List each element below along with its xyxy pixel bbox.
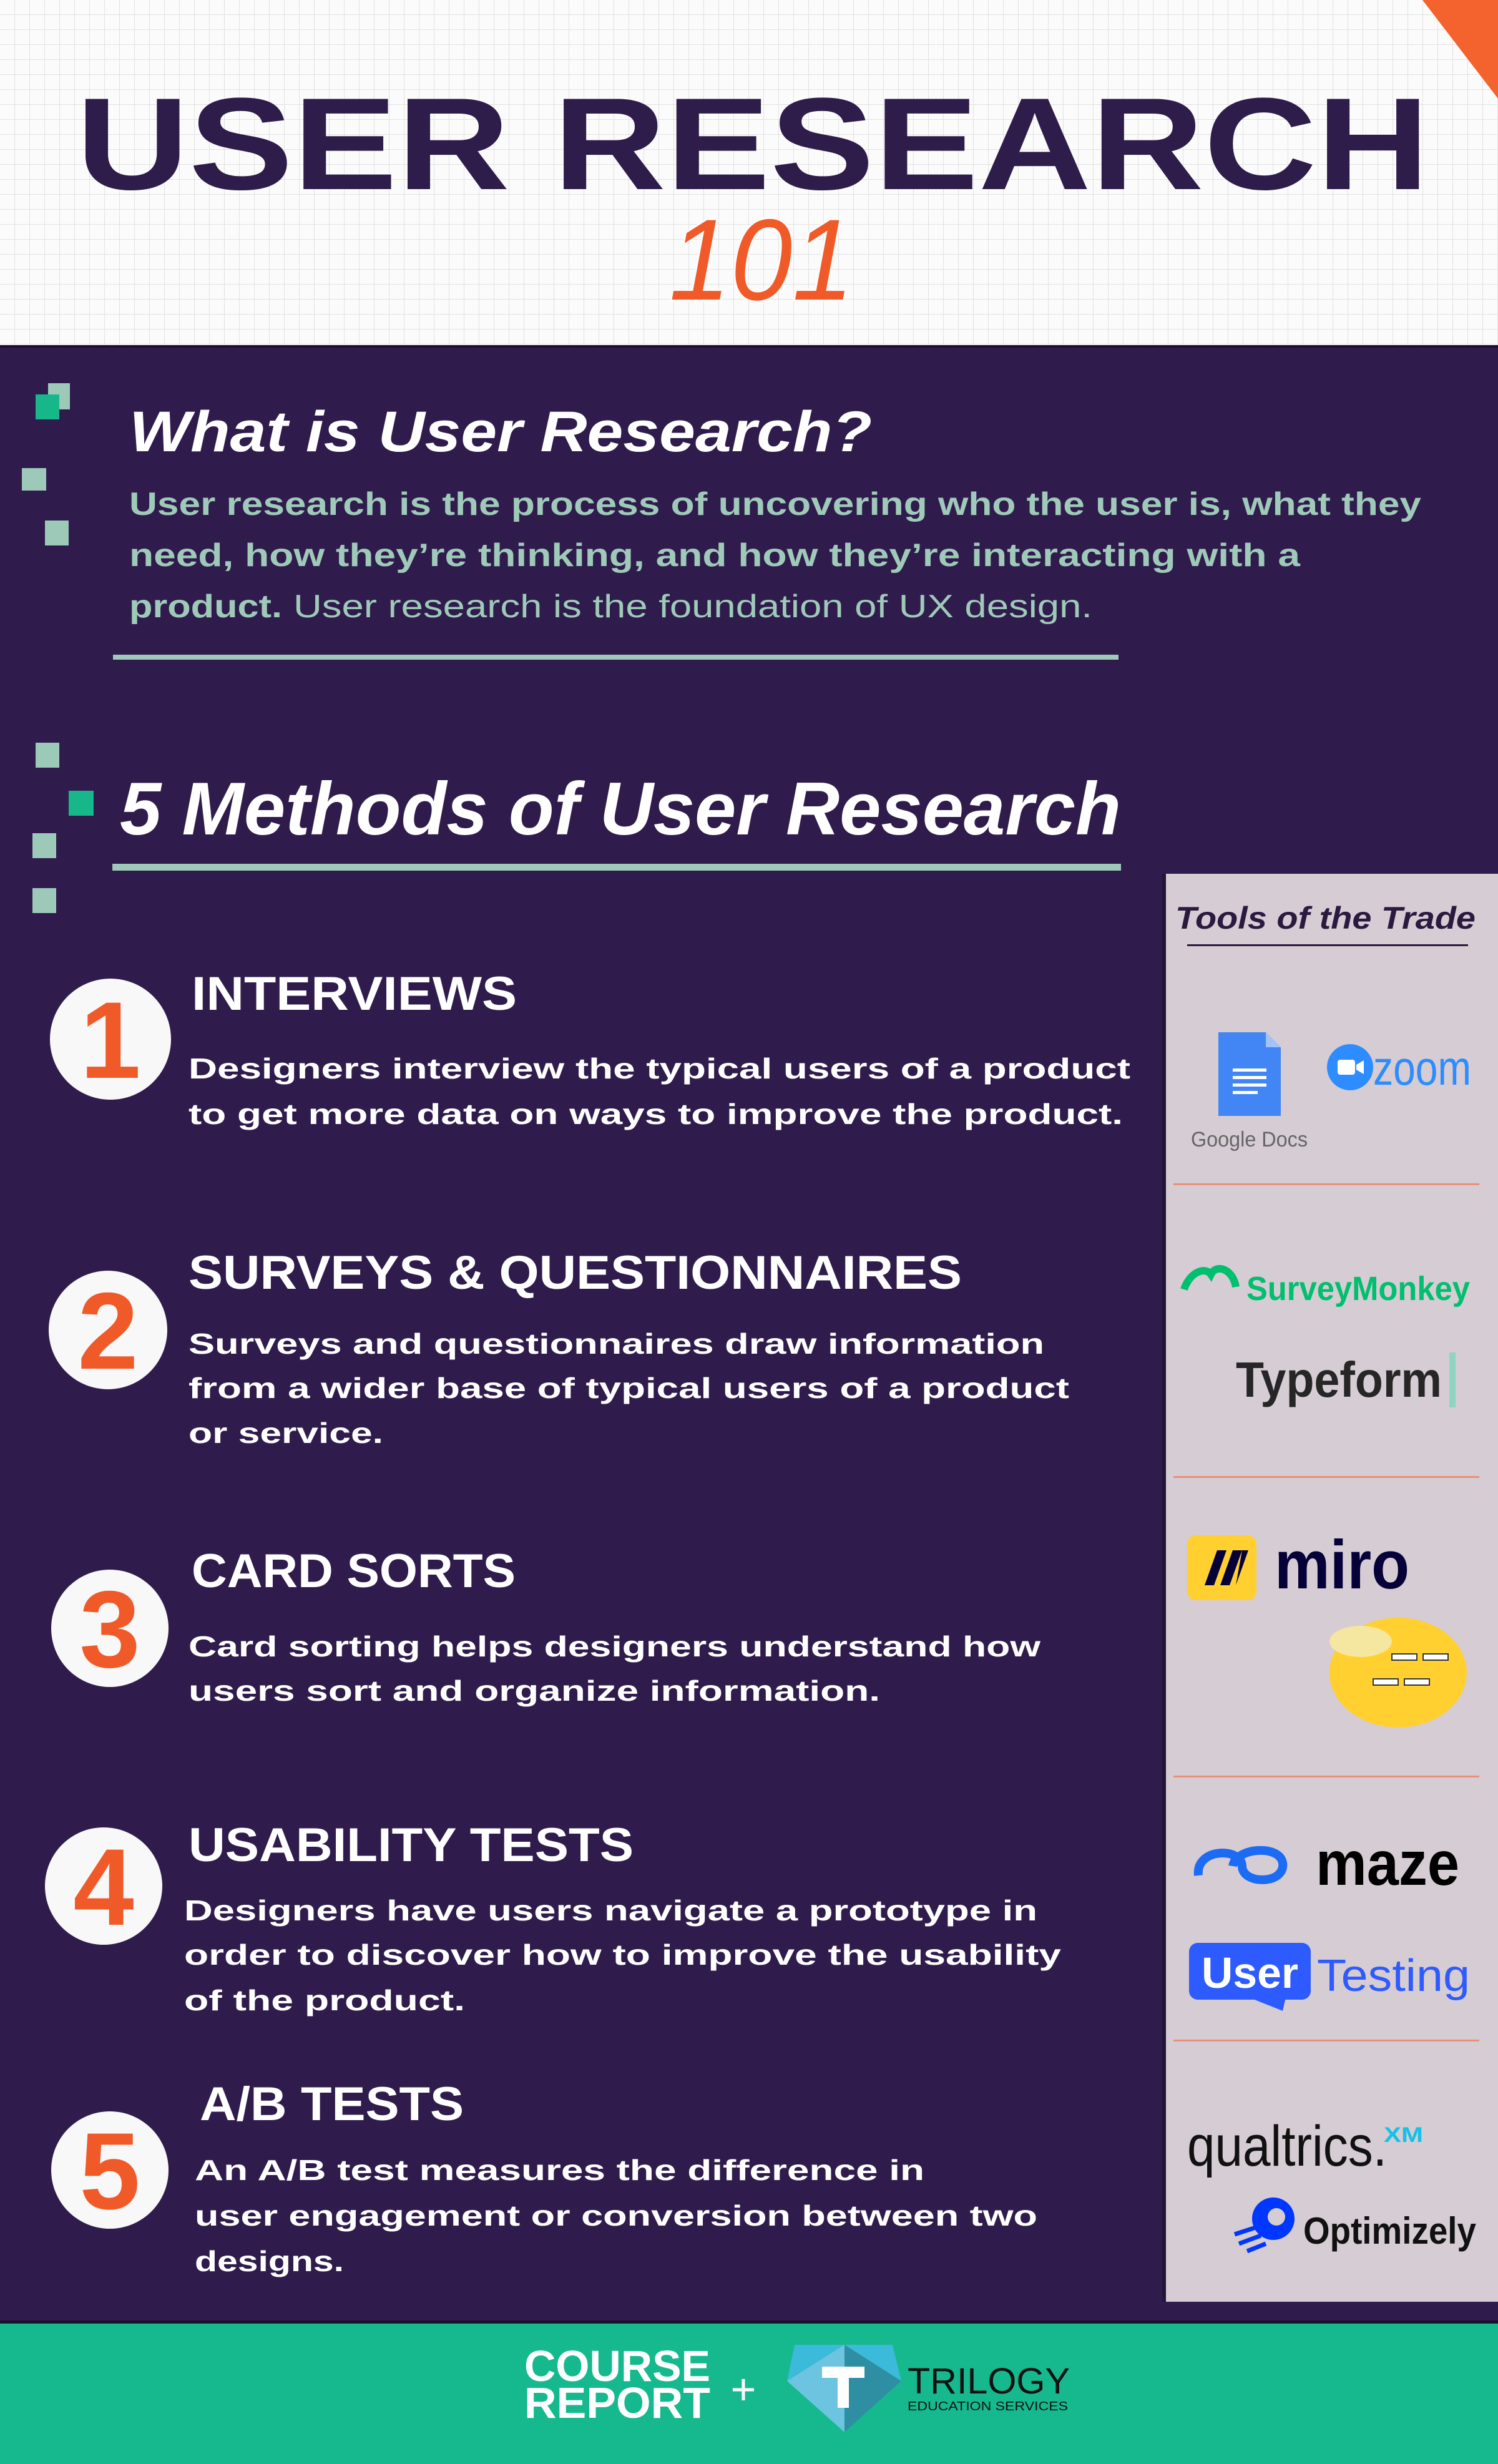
logo: google docs xyxy=(1191,1032,1308,1151)
icon: number 1: 1 xyxy=(80,980,141,1102)
logo: optimizely xyxy=(1235,2198,1477,2252)
icon: number 3 xyxy=(51,1569,169,1691)
logo: optimizely: Optimizely xyxy=(1303,2210,1477,2252)
logo: typeform: Typeform xyxy=(1236,1352,1442,1407)
illustration: yellow blob xyxy=(1329,1618,1467,1728)
method 4: usability tests xyxy=(45,1819,1062,2017)
method 4: usability tests: Designers have users navigate a prototype in xyxy=(184,1894,1037,1927)
method 2: surveys: from a wider base of typical users of a product xyxy=(188,1372,1069,1404)
logo: zoom xyxy=(1327,1040,1471,1095)
logo: zoom: zoom xyxy=(1373,1040,1471,1095)
orange corner triangle xyxy=(1422,0,1498,99)
method 5: a/b tests xyxy=(51,2078,1037,2277)
logo: trilogy: EDUCATION SERVICES xyxy=(908,2400,1068,2413)
subtitle 101: 101 xyxy=(669,196,854,325)
definition paragraph: User research is the foundation of UX design. xyxy=(293,589,1092,625)
logo: usertesting xyxy=(1189,1943,1470,2011)
footer xyxy=(0,2320,1498,2464)
method 2: surveys: SURVEYS & QUESTIONNAIRES xyxy=(188,1246,962,1299)
logo: miro: miro xyxy=(1275,1527,1409,1603)
logo: maze: maze xyxy=(1316,1829,1459,1899)
icon: number 3: 3 xyxy=(79,1569,140,1691)
header background xyxy=(0,0,1498,348)
method 5: a/b tests: An A/B test measures the difference in xyxy=(195,2154,924,2186)
definition paragraph: User research is the process of uncovering who the user is, what they xyxy=(129,486,1421,522)
heading: 5 Methods of User Research: 5 Methods of User Research xyxy=(120,767,1121,851)
definition paragraph xyxy=(129,486,1421,625)
icon: number 4 xyxy=(45,1827,162,1948)
method 3: card sorts: CARD SORTS xyxy=(192,1545,516,1598)
method 2: surveys xyxy=(49,1246,1069,1449)
method 5: a/b tests: A/B TESTS xyxy=(200,2078,464,2131)
logo: surveymonkey: SurveyMonkey xyxy=(1246,1270,1470,1308)
icon: number 4: 4 xyxy=(73,1827,134,1948)
icon: number 1 xyxy=(50,979,171,1102)
logo: course report: COURSE xyxy=(524,2342,710,2390)
definition paragraph: product. xyxy=(129,589,282,625)
logo: course report: REPORT xyxy=(524,2378,710,2427)
icon: number 5 xyxy=(51,2111,169,2232)
method 4: usability tests: USABILITY TESTS xyxy=(188,1819,634,1872)
panel: tools of the trade xyxy=(1162,874,1498,2302)
icon: number 5: 5 xyxy=(79,2111,140,2232)
method 1: interviews: INTERVIEWS xyxy=(192,967,517,1020)
method 3: card sorts xyxy=(51,1545,1040,1707)
method 4: usability tests: of the product. xyxy=(184,1984,465,2017)
heading: What is User Research?: What is User Research? xyxy=(129,400,872,464)
logo: trilogy: TRILOGY xyxy=(908,2361,1070,2402)
logo: miro xyxy=(1187,1527,1409,1603)
method 1: interviews xyxy=(50,967,1130,1130)
icon: number 2: 2 xyxy=(77,1271,139,1392)
method 2: surveys: Surveys and questionnaires draw information xyxy=(188,1327,1044,1360)
logo: google docs: Google Docs xyxy=(1191,1128,1308,1151)
logo: trilogy xyxy=(787,2345,1070,2432)
logo: maze xyxy=(1198,1829,1459,1899)
method 2: surveys: or service. xyxy=(188,1417,383,1449)
logo: qualtrics: XM xyxy=(1384,2123,1423,2147)
method 5: a/b tests: designs. xyxy=(195,2245,344,2277)
method 1: interviews: to get more data on ways to improve the product. xyxy=(188,1098,1123,1130)
method 3: card sorts: users sort and organize information. xyxy=(188,1674,880,1707)
logo: usertesting: User xyxy=(1202,1948,1298,1997)
method 1: interviews: Designers interview the typical users of a product xyxy=(188,1052,1130,1085)
logo: usertesting: Testing xyxy=(1317,1951,1470,2001)
decorative squares group 2 xyxy=(32,743,94,913)
method 4: usability tests: order to discover how to improve the usability xyxy=(184,1938,1062,1971)
logo: qualtrics: qualtrics. xyxy=(1187,2114,1387,2178)
definition paragraph: need, how they’re thinking, and how they’re interacting with a xyxy=(129,537,1301,574)
icon: number 2 xyxy=(49,1271,167,1392)
panel title: Tools of the Trade xyxy=(1175,901,1476,936)
decorative squares group 1 xyxy=(22,383,70,545)
logo: course report xyxy=(524,2342,710,2427)
title: USER RESEARCH xyxy=(76,71,1429,217)
method 5: a/b tests: user engagement or conversion between two xyxy=(195,2199,1037,2232)
plus sign: + xyxy=(731,2365,756,2413)
method 3: card sorts: Card sorting helps designers understand how xyxy=(188,1630,1040,1663)
